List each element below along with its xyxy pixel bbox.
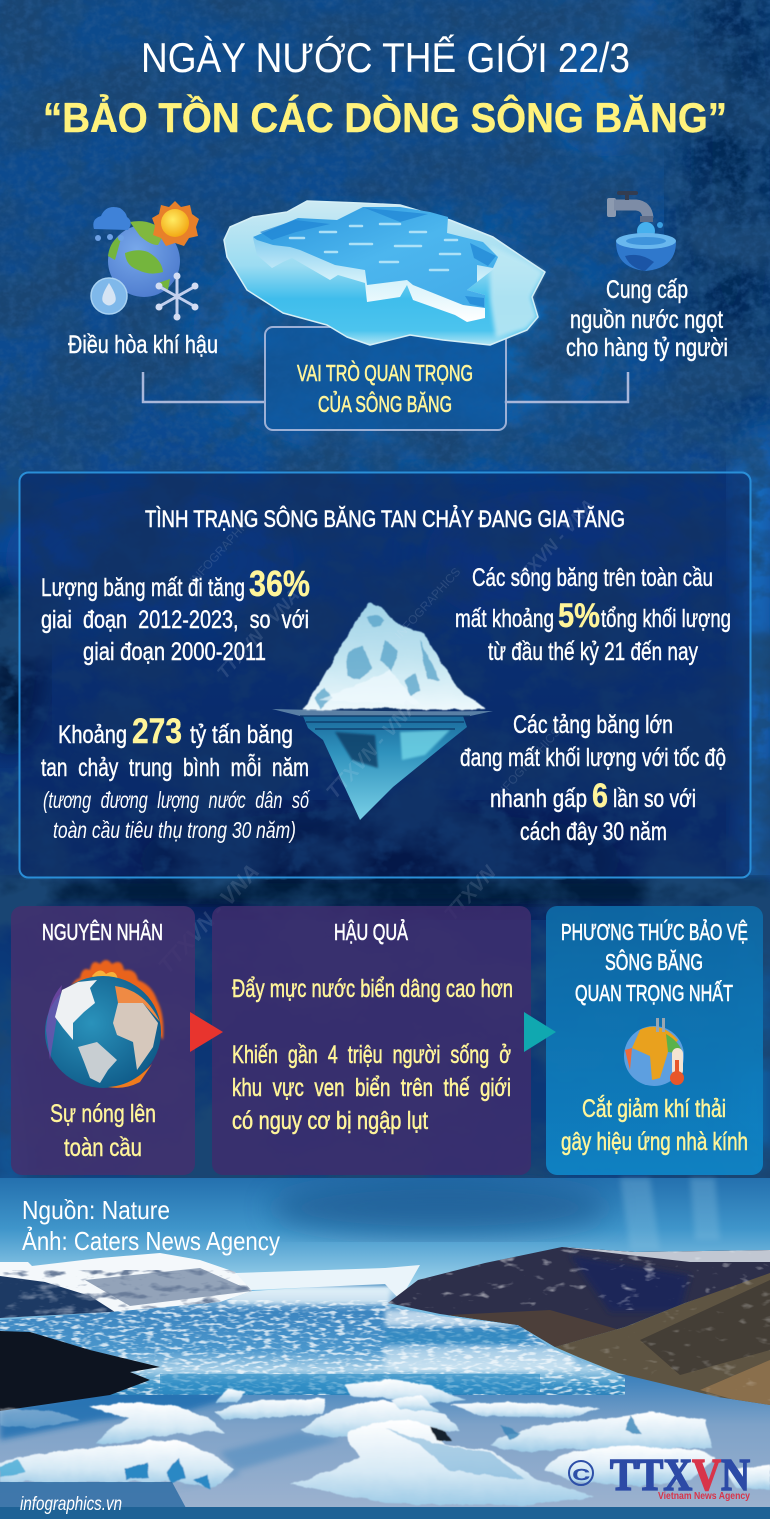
consequence 2 <box>232 1041 511 1135</box>
stat: 5%: 5% <box>558 597 600 635</box>
heading: protection <box>561 917 748 1006</box>
label: climate regulation: Điều hòa khí hậu <box>68 331 218 359</box>
watermarks: TTXVN - VNA <box>508 495 599 593</box>
right brown mountain <box>550 1270 770 1410</box>
stat: 273 billion tons: (tương đương lượng nước dân số <box>43 787 311 813</box>
glacier photo at the bottom <box>0 1178 770 1519</box>
arrow: cause to effect <box>190 1012 223 1052</box>
heading: causes: NGUYÊN NHÂN <box>42 919 163 945</box>
icon: ice map on puddle <box>224 201 545 345</box>
stat: 6 times <box>460 711 726 846</box>
website label: infographics.vn <box>20 1494 122 1515</box>
water <box>0 1375 770 1519</box>
stat: 273 billion tons: tan chảy trung bình mỗi năm <box>41 753 309 782</box>
causes text: Sự nóng lên <box>50 1100 156 1128</box>
stat: 273 billion tons: Khoảng <box>58 721 127 749</box>
logo: TTXVN: TTXVN <box>610 1449 750 1500</box>
watermarks: TTXVN - VNA <box>153 859 264 978</box>
left snow mountain <box>0 1250 260 1320</box>
box text: CỦA SÔNG BĂNG <box>318 389 452 417</box>
title line 1: NGÀY NƯỚC THẾ GIỚI 22/3 <box>141 34 630 81</box>
stat: 6 times: Các tảng băng lớn <box>513 711 673 739</box>
protection text <box>561 1094 748 1156</box>
heading: consequences: HẬU QUẢ <box>334 917 408 945</box>
stat: 36%: giai đoạn 2000-2011 <box>83 638 266 666</box>
watermarks: INFOGRAPHICS <box>492 725 563 802</box>
title line 2: “BẢO TỒN CÁC DÒNG SÔNG BĂNG” <box>43 93 727 141</box>
stat: 6 times: lần so với <box>613 785 696 813</box>
right dark mountain <box>385 1245 770 1350</box>
black hill on the left <box>0 1331 160 1411</box>
stat: 273 billion tons: 273 <box>132 712 182 751</box>
protection text: Cắt giảm khí thải <box>582 1094 726 1123</box>
stat: 273 billion tons <box>41 712 311 843</box>
droplet disc <box>91 278 127 314</box>
watermarks: TTXVN - VNA <box>322 695 423 803</box>
cloud <box>93 207 131 230</box>
sky <box>0 1178 770 1290</box>
watermarks: INFOGRAPHICS <box>187 510 258 587</box>
watermarks: TTXVN - VNA <box>213 585 304 683</box>
logo: TTXVN: c <box>572 1463 590 1485</box>
stat: 36% <box>41 563 310 666</box>
box text <box>297 360 473 417</box>
stat: 36%: 36% <box>249 563 310 604</box>
consequence 2: khu vực ven biển trên thế giới <box>232 1074 511 1102</box>
panel: protection <box>546 906 763 1175</box>
connector lines <box>143 372 628 402</box>
source credits: Ảnh: Caters News Agency <box>22 1226 280 1256</box>
website band <box>0 1482 186 1508</box>
consequence 2: Khiến gần 4 triệu người sống ở <box>232 1041 511 1069</box>
arrow: effect to solution <box>524 1012 556 1052</box>
ice floes <box>0 1380 770 1506</box>
consequence 1: Đẩy mực nước biển dâng cao hơn <box>232 975 513 1003</box>
stat: 6 times: nhanh gấp <box>490 785 587 813</box>
causes text: toàn cầu <box>64 1134 142 1162</box>
stat: 6 times: cách đây 30 năm <box>520 818 667 846</box>
stat: 273 billion tons: toàn cầu tiêu thụ trong 30 năm) <box>53 817 296 843</box>
stat: 273 billion tons: tỷ tấn băng <box>190 721 293 749</box>
watermarks: INFOGRAPHICS <box>392 565 463 642</box>
glacier surface <box>0 1284 625 1395</box>
far ice field <box>235 1265 420 1300</box>
panel heading: TÌNH TRẠNG SÔNG BĂNG TAN CHẢY ĐANG GIA TĂNG <box>145 504 625 533</box>
stat: 36%: giai đoạn 2012-2023, so với <box>41 606 309 634</box>
icon: globe and thermometer <box>624 1018 684 1086</box>
causes text <box>50 1100 156 1162</box>
panel: causes <box>11 906 195 1175</box>
icon: water tap and globe <box>607 192 676 271</box>
central role box <box>265 327 506 430</box>
stat: 6 times: 6 <box>592 777 608 815</box>
sun <box>152 201 199 246</box>
label: fresh water supply: Cung cấp <box>606 276 688 304</box>
source credits <box>22 1195 280 1256</box>
label: fresh water supply: cho hàng tỷ người <box>566 334 728 362</box>
panel: melting status <box>20 472 750 878</box>
stat: 5% <box>455 564 731 666</box>
watermarks: TTXVN <box>440 861 501 925</box>
icon: climate globe <box>91 201 199 320</box>
label: fresh water supply: nguồn nước ngọt <box>570 306 723 334</box>
watermarks <box>153 495 599 978</box>
stat: 5%: từ đầu thế kỷ 21 đến nay <box>488 638 698 666</box>
snowflake <box>156 272 198 320</box>
icon: iceberg <box>272 602 493 820</box>
panel: consequences <box>212 906 531 1175</box>
title <box>43 34 727 141</box>
box text: VAI TRÒ QUAN TRỌNG <box>297 360 473 386</box>
stat: 36%: Lượng băng mất đi tăng <box>41 574 245 602</box>
source credits: Nguồn: Nature <box>22 1195 170 1225</box>
stat: 5%: mất khoảng <box>455 605 554 633</box>
icon: burning globe <box>45 960 163 1088</box>
heading: protection: SÔNG BĂNG <box>605 948 703 975</box>
label: fresh water supply <box>566 276 728 362</box>
logo: TTXVN: Vietnam News Agency <box>658 1491 750 1502</box>
consequence 2: có nguy cơ bị ngập lụt <box>232 1107 428 1135</box>
